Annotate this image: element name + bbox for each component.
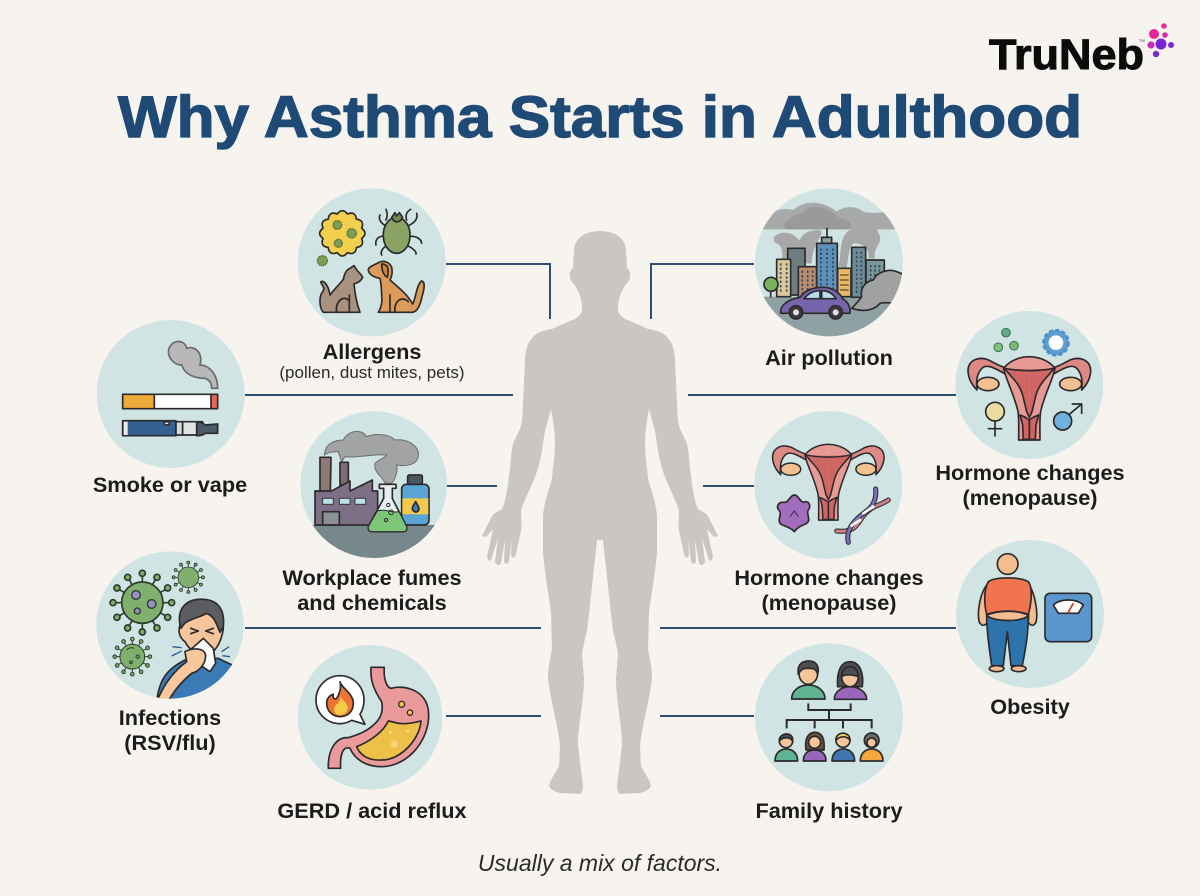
connector: obesity to body <box>660 627 956 629</box>
panel: smoke or vape <box>93 320 247 497</box>
icon: allergens <box>298 188 446 336</box>
icon: family tree <box>755 643 903 791</box>
label: hormone changes centre <box>734 565 924 615</box>
connector: allergens to body <box>446 264 550 319</box>
panel: workplace fumes <box>282 411 462 615</box>
icon: uterus, flower and DNA <box>754 411 902 559</box>
panel: hormone changes centre <box>734 411 924 615</box>
label: hormone changes centre: (menopause) <box>762 590 896 615</box>
icon: viruses and sneezing person <box>96 551 245 702</box>
footer note: Usually a mix of factors. <box>478 850 722 876</box>
label: infections: Infections <box>119 705 221 730</box>
label: workplace fumes: Workplace fumes <box>282 565 462 590</box>
label: GERD: GERD / acid reflux <box>277 798 467 823</box>
label: allergens: Allergens <box>323 339 421 364</box>
connector: smoke or vape to body <box>245 394 513 396</box>
label: family history: Family history <box>755 798 903 823</box>
label: infections <box>119 705 221 755</box>
panel: allergens <box>279 188 465 382</box>
panel: infections <box>96 551 245 755</box>
panel: air pollution <box>753 188 907 370</box>
label: obesity: Obesity <box>990 694 1070 719</box>
connector: air pollution to body <box>651 264 754 319</box>
connector: hormone changes right to body <box>688 394 956 396</box>
icon: stomach and flame <box>298 645 442 790</box>
connector: infections to body <box>245 627 541 629</box>
label: infections: (RSV/flu) <box>124 730 216 755</box>
label: workplace fumes: and chemicals <box>297 590 447 615</box>
label: hormone changes right <box>935 460 1125 510</box>
icon: reproductive system and gender symbols <box>955 311 1103 459</box>
title: Why Asthma Starts in Adulthood <box>118 85 1082 150</box>
panel: GERD <box>277 645 467 823</box>
logo: TruNeb: TruNeb <box>989 31 1144 79</box>
logo: TruNeb <box>989 23 1174 79</box>
icon: factory and chemicals <box>298 411 448 562</box>
label: hormone changes right: Hormone changes <box>935 460 1125 485</box>
connector: family history to body <box>660 715 754 717</box>
human body silhouette <box>482 231 718 794</box>
icon: cigarette and vape <box>97 320 245 468</box>
label: hormone changes right: (menopause) <box>963 485 1097 510</box>
connector: hormone changes centre to body <box>703 485 754 487</box>
connector: workplace fumes to body <box>446 485 497 487</box>
panel: obesity <box>956 540 1104 719</box>
label: smoke or vape: Smoke or vape <box>93 472 247 497</box>
label: air pollution: Air pollution <box>765 345 893 370</box>
logo: TruNeb: TM <box>1139 38 1145 43</box>
label: hormone changes centre: Hormone changes <box>734 565 924 590</box>
label: workplace fumes <box>282 565 462 615</box>
panel: family history <box>755 643 903 823</box>
sublabel: allergens: (pollen, dust mites, pets) <box>279 363 465 382</box>
icon: person and scale <box>956 540 1104 688</box>
connector: GERD to body <box>446 715 541 717</box>
icon: air pollution <box>753 188 907 340</box>
panel: hormone changes right <box>935 311 1125 510</box>
